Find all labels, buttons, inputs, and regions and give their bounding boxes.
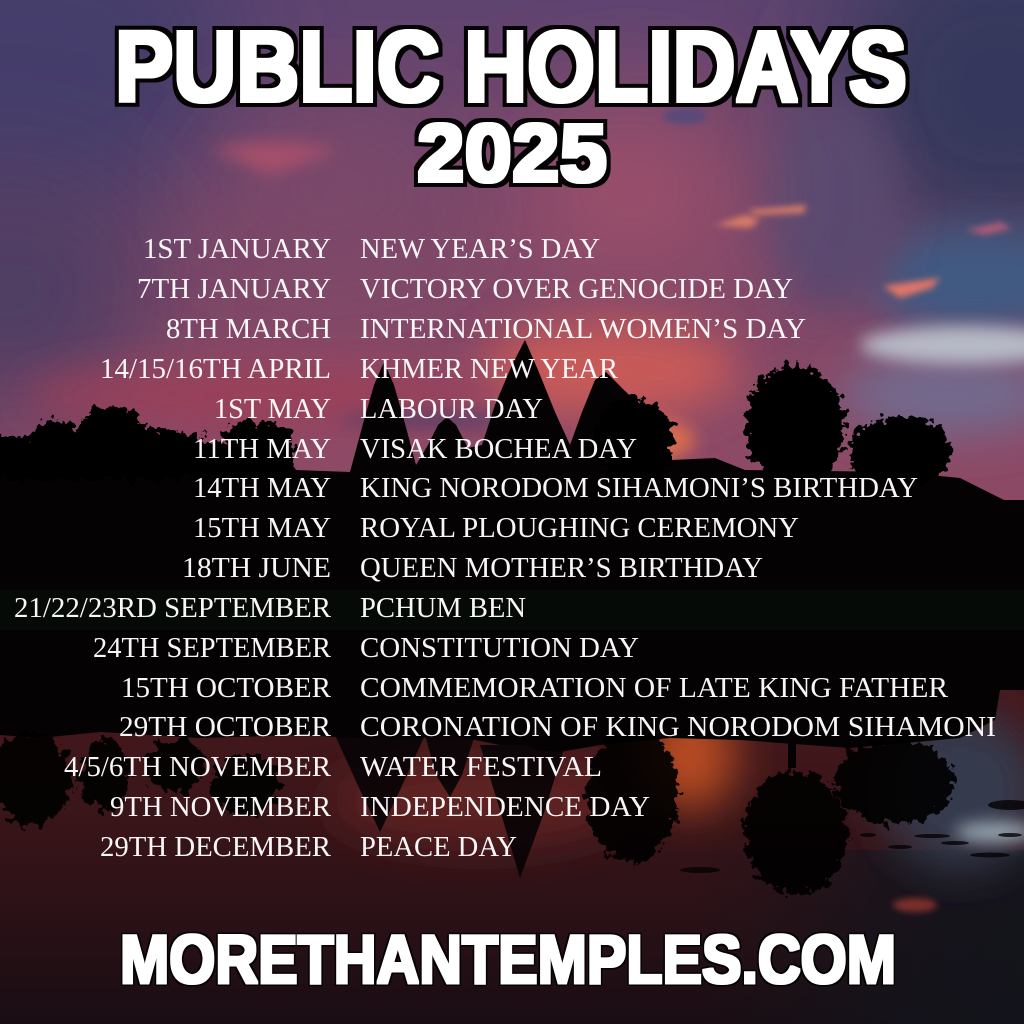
date: 1st May: 1ST MAY [214, 394, 331, 425]
holiday: Pchum Ben: PCHUM BEN [360, 593, 526, 624]
holiday: Coronation of King Norodom Sihamoni: CORONATION OF KING NORODOM SIHAMONI [360, 712, 996, 743]
date: 11th May: 11TH MAY [193, 434, 331, 465]
date: 29th December: 29TH DECEMBER [100, 832, 331, 863]
holiday: Khmer New Year: KHMER NEW YEAR [360, 354, 618, 385]
subtitle: year: 2025 [417, 108, 607, 199]
holiday: Royal Ploughing Ceremony: ROYAL PLOUGHING CEREMONY [360, 513, 799, 544]
background: water [0, 635, 1024, 1024]
holiday: New Year's Day: NEW YEAR’S DAY [360, 234, 600, 265]
holiday: Labour Day: LABOUR DAY [360, 394, 543, 425]
reflected towers [335, 735, 565, 878]
footer website: MORETHANTEMPLES.COM [120, 921, 896, 998]
holiday: International Women's Day: INTERNATIONAL WOMEN’S DAY [360, 314, 806, 345]
background: dark green lawn [0, 590, 1024, 635]
trees [0, 365, 952, 488]
date: 9th November: 9TH NOVEMBER [110, 792, 331, 823]
holiday: Queen Mother's Birthday: QUEEN MOTHER’S BIRTHDAY [360, 553, 763, 584]
reflected trees [0, 727, 955, 895]
date: 29th October: 29TH OCTOBER [119, 712, 331, 743]
date: 15th May: 15TH MAY [193, 513, 331, 544]
holiday: Water Festival: WATER FESTIVAL [360, 752, 602, 783]
holiday: Visak Bochea Day: VISAK BOCHEA DAY [360, 434, 637, 465]
holiday list [14, 234, 996, 863]
lily pads [680, 800, 1024, 873]
background: ground [0, 500, 1024, 590]
holiday: King Norodom Sihamoni's Birthday: KING NORODOM SIHAMONI’S BIRTHDAY [360, 473, 918, 504]
date: 14th May: 14TH MAY [193, 473, 331, 504]
holiday: Commemoration of Late King Father: COMMEMORATION OF LATE KING FATHER [360, 673, 948, 704]
title: PUBLIC HOLIDAYS [115, 11, 907, 123]
date: 1st January: 1ST JANUARY [143, 234, 331, 265]
date: 24th September: 24TH SEPTEMBER [93, 633, 331, 664]
holiday: Peace Day: PEACE DAY [360, 832, 517, 863]
date: 18th June: 18TH JUNE [182, 553, 331, 584]
date: 7th January: 7TH JANUARY [137, 274, 331, 305]
background: temple and tree silhouette [0, 340, 1024, 640]
holiday: Constitution Day: CONSTITUTION DAY [360, 633, 639, 664]
holiday: Independence Day: INDEPENDENCE DAY [360, 792, 650, 823]
date: 4/5/6th November: 4/5/6TH NOVEMBER [64, 752, 331, 783]
date: 15th October: 15TH OCTOBER [121, 673, 331, 704]
holiday: Victory Over Genocide Day: VICTORY OVER GENOCIDE DAY [360, 274, 793, 305]
date: 8th March: 8TH MARCH [166, 314, 331, 345]
temple towers [0, 340, 1024, 640]
date: 14/15/16th April: 14/15/16TH APRIL [100, 354, 331, 385]
background: reflection in water [0, 630, 1024, 895]
background: sunset sky [0, 0, 1024, 640]
date: 21/22/23rd September: 21/22/23RD SEPTEMBER [14, 593, 331, 624]
